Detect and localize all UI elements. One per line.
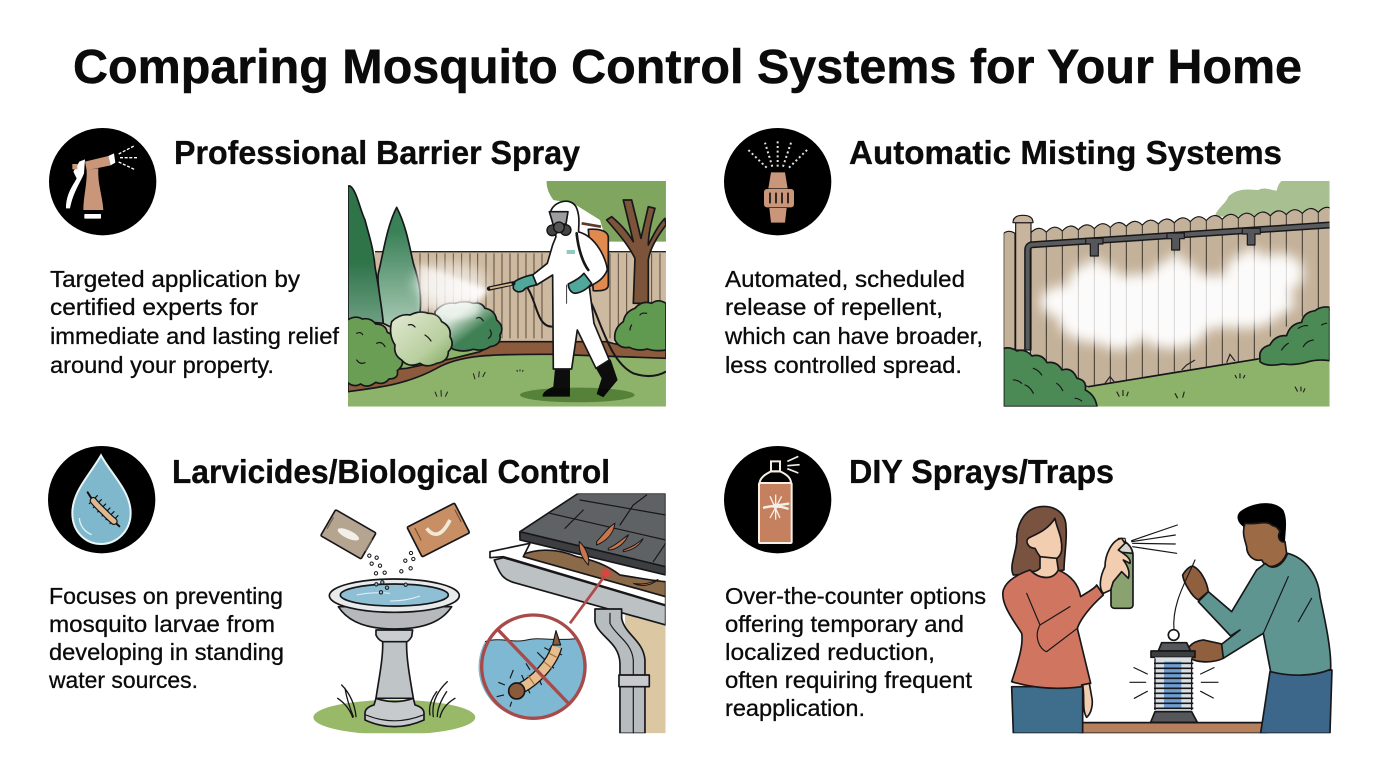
bird bath [313,579,475,735]
description: mosquito larvae from [49,611,275,637]
panel: professional barrier spray [49,128,666,407]
description [50,266,340,378]
description: reapplication. [725,695,865,721]
description: Targeted application by [50,266,301,292]
heading: Larvicides/Biological Control [172,454,610,491]
icon: water drop with larva [48,446,155,553]
icon: aerosol can [724,446,831,553]
woman with spray can [1003,506,1177,733]
description: Automated, scheduled [725,266,965,292]
illustration: bird bath and gutter larvae [313,493,666,735]
illustration: fence misting system [1004,181,1334,407]
description: immediate and lasting relief [50,323,340,349]
description: water sources. [48,667,198,693]
title: Comparing Mosquito Control Systems for Your Home [73,41,1302,94]
description: which can have broader, [724,323,983,349]
heading: Automatic Misting Systems [849,135,1282,172]
panel: DIY sprays and traps [724,446,1332,733]
description: developing in standing [49,639,284,665]
description: localized reduction, [725,639,935,665]
panel: larvicides and biological control [48,446,666,735]
icon: misting nozzle [724,128,831,235]
callout: no larvae [478,568,611,718]
illustration: worker spraying yard [347,181,666,407]
description: Over-the-counter options [725,583,986,609]
gutter and roof [490,493,666,733]
panel: automatic misting systems [724,128,1334,407]
heading: Professional Barrier Spray [174,135,580,172]
description: around your property. [50,352,274,378]
icon: spray gun [49,128,156,235]
heading: DIY Sprays/Traps [849,454,1114,491]
bug zapper lantern [1130,630,1218,722]
description [724,266,983,378]
man with bug zapper [1174,503,1332,733]
description [48,583,284,693]
description [725,583,986,721]
spray cloud [413,263,488,319]
description: Focuses on preventing [49,583,283,609]
description: often requiring frequent [725,667,973,693]
description: offering temporary and [725,611,964,637]
larvicide packets [321,503,470,575]
description: less controlled spread. [725,352,962,378]
description: certified experts for [50,294,258,320]
worker suit [533,201,609,369]
mist clouds [1040,245,1303,353]
illustration: people using spray and trap [1003,503,1332,733]
description: release of repellent, [725,294,943,320]
